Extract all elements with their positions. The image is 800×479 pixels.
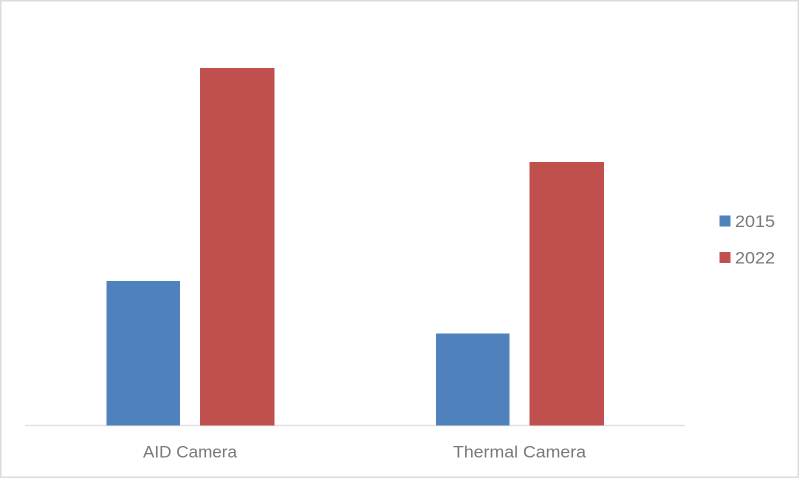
Thermal Camera group [436,162,604,462]
legend item: 2015: 2015 [735,212,775,231]
bar: AID Camera 2015 [106,281,180,426]
bar: Thermal Camera 2022 [530,162,604,426]
label: AID Camera: AID Camera [143,442,238,462]
legend item: 2022: 2022 [735,248,775,268]
bar: AID Camera 2022 [200,68,274,426]
label: Thermal Camera: Thermal Camera [453,442,587,462]
AID Camera group [106,68,274,462]
legend [720,212,775,268]
bar: Thermal Camera 2015 [436,334,510,426]
